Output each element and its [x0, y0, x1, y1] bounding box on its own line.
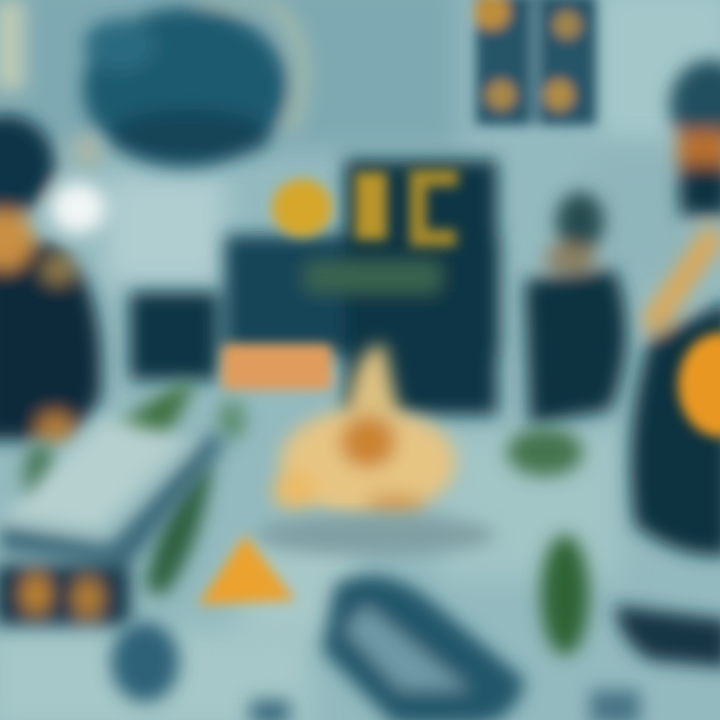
- golden dish centre: [273, 345, 456, 517]
- green leaves: [24, 380, 589, 655]
- plate under dish: [255, 515, 495, 555]
- person centre right: [525, 192, 626, 425]
- orange triangle pile: [198, 535, 295, 605]
- central dark monitor: [130, 160, 500, 415]
- yellow sign on monitor: [272, 172, 458, 240]
- dark object bottom right: [250, 605, 720, 720]
- tray lower left: [0, 415, 225, 625]
- person left: [0, 0, 106, 444]
- person right: [631, 60, 720, 556]
- device bottom centre: [322, 575, 525, 720]
- orange bar: [222, 344, 332, 390]
- cup bottom left: [111, 622, 179, 702]
- orange circle right: [678, 333, 720, 437]
- globe top left: [83, 0, 303, 168]
- panel top right with dots: [474, 0, 596, 125]
